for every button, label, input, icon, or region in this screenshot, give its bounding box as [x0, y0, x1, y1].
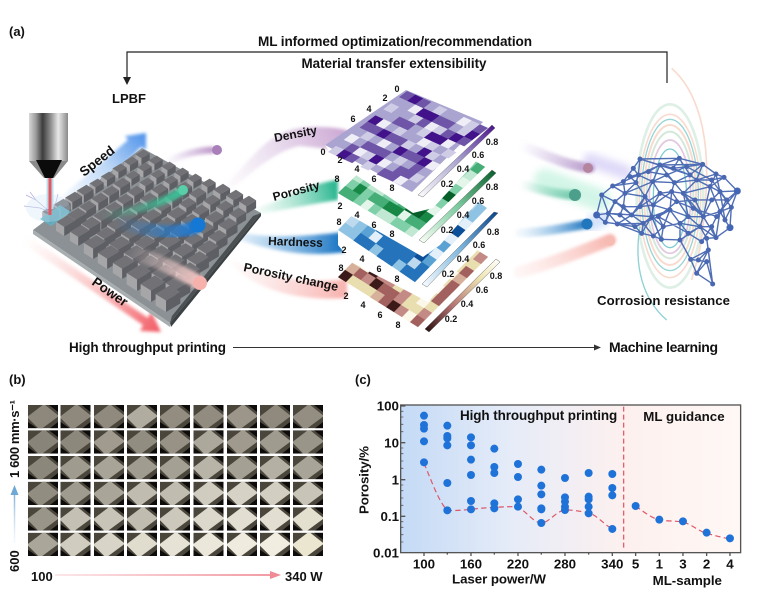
ribbons from heatmaps to network [520, 145, 625, 272]
heatmap axis tick labels: 2 [337, 201, 343, 211]
heatmap axis tick labels: 0 [394, 84, 400, 94]
sphere: hardness [190, 218, 206, 232]
label: speed: Speed [77, 143, 118, 179]
heatmap: porosity change [338, 207, 500, 332]
label: high throughput printing: High throughput printing [69, 340, 226, 355]
region heading: ML guidance: ML guidance [643, 409, 725, 424]
heatmap axis tick labels: 0.4 [457, 254, 469, 264]
panel: porosity chart [357, 399, 741, 588]
axis label: scan speed: 1 600 mm·s⁻¹ [7, 400, 22, 478]
x tick labels: 160 [460, 557, 482, 572]
mask behind porosity map [338, 123, 500, 257]
colorbar: porosity change [425, 259, 500, 332]
label: porosity change: Porosity change [242, 260, 340, 294]
x tick labels: 5 [632, 557, 640, 572]
divider line [622, 407, 626, 548]
label: hardness: Hardness [268, 234, 323, 250]
heatmap axis tick labels: 6 [377, 310, 383, 320]
heatmap axis tick labels: 6 [371, 220, 377, 230]
sphere: pink output [605, 236, 615, 246]
illustration: laser printing of samples [22, 113, 261, 332]
heatmap axis tick labels: 0.4 [461, 299, 473, 309]
x tick labels: 1 [656, 557, 664, 572]
region heading: high throughput printing: High throughput printing [460, 408, 617, 423]
heatmap: hardness [338, 156, 498, 287]
y axis title: Porosity/% [357, 446, 372, 514]
label: 100: 100 [31, 569, 53, 584]
heatmap axis tick labels: 0.2 [445, 314, 457, 324]
y tick labels: 0.1 [380, 509, 400, 524]
network nodes [602, 158, 731, 284]
label: machine learning: Machine learning [609, 339, 718, 355]
panel: sample photo grid [27, 404, 324, 558]
panel label (c): (c) [355, 372, 371, 387]
sphere: density [212, 145, 222, 155]
x tick labels: 3 [679, 557, 687, 572]
minimum trend line [424, 463, 730, 539]
heatmap axis tick labels: 0.2 [441, 179, 453, 189]
label: LPBF: LPBF [112, 91, 146, 106]
sphere: purple output [583, 163, 593, 173]
heatmap axis tick labels: 4 [354, 164, 360, 174]
x tick labels: 220 [507, 557, 529, 572]
arrow: speed [55, 133, 146, 222]
data points: high throughput [420, 412, 616, 533]
panel label (a): (a) [9, 24, 25, 39]
heatmap axis tick labels: 0.2 [442, 269, 454, 279]
heatmap axis tick labels: 0.6 [476, 285, 488, 295]
x tick labels: 340 [601, 557, 623, 572]
heatmap axis tick labels: 0.2 [441, 225, 453, 235]
laser beam [46, 175, 54, 215]
heatmap axis tick labels: 0.6 [472, 196, 484, 206]
x axis title: laser power: Laser power/W [452, 571, 546, 586]
heatmap axis tick labels: 4 [360, 300, 366, 310]
heatmap axis tick labels: 8 [338, 263, 344, 273]
colorbar: porosity [419, 170, 496, 243]
label: 340 W: 340 W [285, 569, 323, 584]
heatmap axis tick labels [320, 84, 502, 330]
data points: ML guidance [632, 502, 734, 542]
laser nozzle [29, 113, 68, 178]
property trails over the cubes [100, 150, 214, 282]
heading: material transfer: Material transfer extensibility [302, 56, 487, 71]
colorbar: density [418, 125, 495, 197]
array of printed cubes [42, 150, 256, 312]
network edges [597, 158, 737, 284]
heatmap axis tick labels: 4 [366, 104, 372, 114]
heatmap axis tick labels: 0.8 [490, 271, 502, 281]
arrow: power direction [55, 571, 281, 579]
heatmap axis tick labels: 8 [336, 217, 342, 227]
colorbar: hardness [422, 212, 498, 287]
teal first sample [40, 205, 71, 226]
large network nodes [597, 191, 737, 228]
heatmap axis tick labels: 8 [394, 274, 400, 284]
y tick labels: 0.01 [373, 545, 400, 560]
mask behind hardness map [338, 156, 503, 302]
sphere: porosity change [193, 276, 207, 290]
heatmap axis tick labels: 8 [334, 174, 340, 184]
heatmap axis tick labels: 2 [343, 291, 349, 301]
axes and ticks [401, 405, 741, 556]
heatmap axis tick labels: 0.8 [487, 227, 499, 237]
build plate [33, 148, 261, 327]
heatmap axis tick labels: 4 [359, 254, 365, 264]
heatmap axis tick labels: 0 [320, 147, 326, 157]
y tick labels [373, 399, 400, 560]
heatmap axis tick labels: 0.6 [472, 150, 484, 160]
heatmap axis tick labels: 6 [350, 114, 356, 124]
x tick labels: 100 [413, 557, 435, 572]
heatmap axis tick labels: 0.6 [473, 240, 485, 250]
heatmap axis tick labels: 4 [354, 210, 360, 220]
y tick labels: 10 [384, 435, 399, 450]
x tick labels [413, 557, 734, 572]
heatmap axis tick labels: 8 [389, 183, 395, 193]
arrow: printing to machine learning [233, 344, 601, 350]
heatmap axis tick labels: 0.8 [486, 137, 498, 147]
sparks [24, 192, 70, 222]
heatmap axis tick labels: 2 [337, 155, 343, 165]
heatmap axis tick labels: 6 [371, 174, 377, 184]
x tick labels: 2 [703, 557, 710, 572]
label: corrosion resistance: Corrosion resistance [597, 293, 730, 308]
axis label: 600: 600 [7, 550, 22, 572]
x tick labels: 4 [726, 557, 734, 572]
heatmap axis tick labels: 8 [395, 320, 401, 330]
heatmap axis tick labels: 0.4 [457, 210, 469, 220]
y tick labels: 1 [392, 472, 400, 487]
label: density: Density [273, 123, 318, 145]
heatmap axis tick labels: 0.8 [486, 182, 498, 192]
heatmap axis tick labels: 8 [389, 229, 395, 239]
label: porosity: Porosity [271, 178, 321, 204]
feedback arrow [123, 52, 667, 85]
ribbons from samples to heatmaps [218, 127, 347, 299]
heatmap axis tick labels: 2 [382, 93, 388, 103]
sphere: blue output [582, 218, 592, 230]
neural network brain with rings [597, 68, 737, 320]
sphere: porosity [178, 185, 188, 195]
heatmap axis tick labels: 6 [376, 264, 382, 274]
x axis title: ML sample: ML-sample [653, 573, 722, 588]
heading: ML informed optimization: ML informed optimization/recommendation [258, 34, 532, 49]
concentric rings [637, 68, 707, 320]
x tick labels: 280 [554, 557, 576, 572]
y tick labels: 100 [377, 399, 399, 414]
panel label (b): (b) [9, 372, 26, 387]
heatmap axis tick labels: 0.4 [457, 164, 469, 174]
chart background [401, 405, 741, 553]
heatmap axis tick labels: 2 [341, 245, 347, 255]
heatmap: density [325, 90, 495, 197]
heatmap: porosity [338, 123, 496, 243]
arrow: power [22, 232, 161, 332]
mask behind density map [325, 90, 500, 213]
arrow: speed direction [10, 485, 18, 543]
sphere: green output [569, 189, 581, 201]
label: power: Power [89, 274, 131, 310]
